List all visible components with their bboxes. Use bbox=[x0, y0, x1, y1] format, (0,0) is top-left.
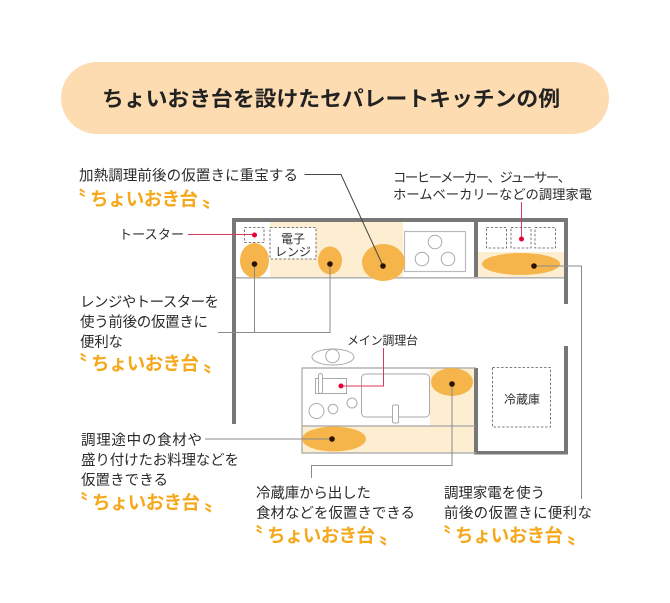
label: toaster: トースター bbox=[119, 227, 184, 242]
label: main counter: メイン調理台 bbox=[347, 332, 418, 348]
callout: from refrigerator bbox=[243, 485, 415, 548]
callout: appliance use: 〟 bbox=[567, 524, 589, 548]
callout: plating bbox=[68, 432, 239, 516]
microwave: 電子 bbox=[281, 232, 305, 246]
callout: cooking prep: 〟 bbox=[202, 187, 224, 212]
callout: appliance use bbox=[431, 485, 592, 548]
callout: microwave and toaster: 便利な bbox=[80, 334, 123, 351]
callout: plating: 仮置きできる bbox=[81, 472, 168, 489]
callout: plating: 調理途中の食材や bbox=[81, 432, 202, 449]
callout: coffee maker appliances: ホームベーカリーなどの調理家電 bbox=[393, 187, 592, 202]
bowls bbox=[309, 398, 357, 418]
callout: plating: 盛り付けたお料理などを bbox=[81, 452, 239, 469]
kitchen floor plan bbox=[232, 218, 568, 454]
callout: plating: 〟 bbox=[204, 490, 226, 516]
callout: microwave and toaster: レンジやトースターを bbox=[80, 294, 219, 311]
callout: from refrigerator: 〟 bbox=[379, 524, 401, 548]
callout: from refrigerator: 〝 bbox=[243, 524, 263, 547]
callout: appliance use: 〝 bbox=[431, 524, 451, 547]
walls bbox=[232, 218, 568, 454]
callout: appliance use: 調理家電を使う bbox=[444, 485, 545, 502]
refrigerator: 冷蔵庫 bbox=[504, 392, 540, 406]
callout: plating: 〝 bbox=[68, 491, 88, 514]
callout: from refrigerator: ちょいおき台 bbox=[267, 525, 375, 546]
cutting board and knife bbox=[316, 374, 346, 394]
lower counter highlight zones bbox=[302, 368, 475, 453]
callout: plating: ちょいおき台 bbox=[92, 492, 200, 513]
callout: microwave and toaster: ちょいおき台 bbox=[91, 353, 199, 374]
callout: cooking prep: ちょいおき台 bbox=[90, 188, 198, 210]
callout: cooking prep bbox=[66, 168, 298, 212]
orange spots bbox=[240, 243, 560, 452]
title banner: ちょいおき台を設けたセパレートキッチンの例 bbox=[102, 88, 560, 111]
callout: appliance use: ちょいおき台 bbox=[455, 525, 563, 546]
callout: from refrigerator: 冷蔵庫から出した bbox=[256, 485, 371, 502]
microwave: レンジ bbox=[275, 245, 311, 259]
upper counter edge bbox=[236, 277, 564, 279]
callout: from refrigerator: 食材などを仮置きできる bbox=[256, 505, 415, 522]
callout: microwave and toaster: 使う前後の仮置きに bbox=[80, 314, 208, 331]
leader lines bbox=[188, 174, 582, 499]
callout: cooking prep: 〝 bbox=[66, 188, 86, 210]
appliance boxes bbox=[486, 228, 556, 248]
toaster box bbox=[244, 228, 264, 242]
leader dots bbox=[252, 232, 537, 442]
title banner bbox=[61, 62, 609, 134]
callout: appliance use: 前後の仮置きに便利な bbox=[444, 505, 592, 522]
callout: microwave and toaster: 〝 bbox=[67, 352, 87, 375]
main counter outline bbox=[302, 368, 476, 453]
callout: cooking prep: 加熱調理前後の仮置きに重宝する bbox=[79, 168, 298, 184]
microwave bbox=[270, 228, 316, 259]
cooktop bbox=[404, 232, 466, 272]
upper counter highlight zones bbox=[270, 221, 564, 277]
person bbox=[312, 349, 354, 365]
callout: coffee maker appliances: コーヒーメーカー、ジューサー、 bbox=[393, 170, 571, 185]
callout: microwave and toaster bbox=[67, 294, 225, 376]
callout: coffee maker appliances bbox=[393, 170, 592, 202]
sink bbox=[362, 374, 430, 423]
refrigerator bbox=[492, 368, 550, 427]
callout: microwave and toaster: 〟 bbox=[203, 352, 225, 376]
